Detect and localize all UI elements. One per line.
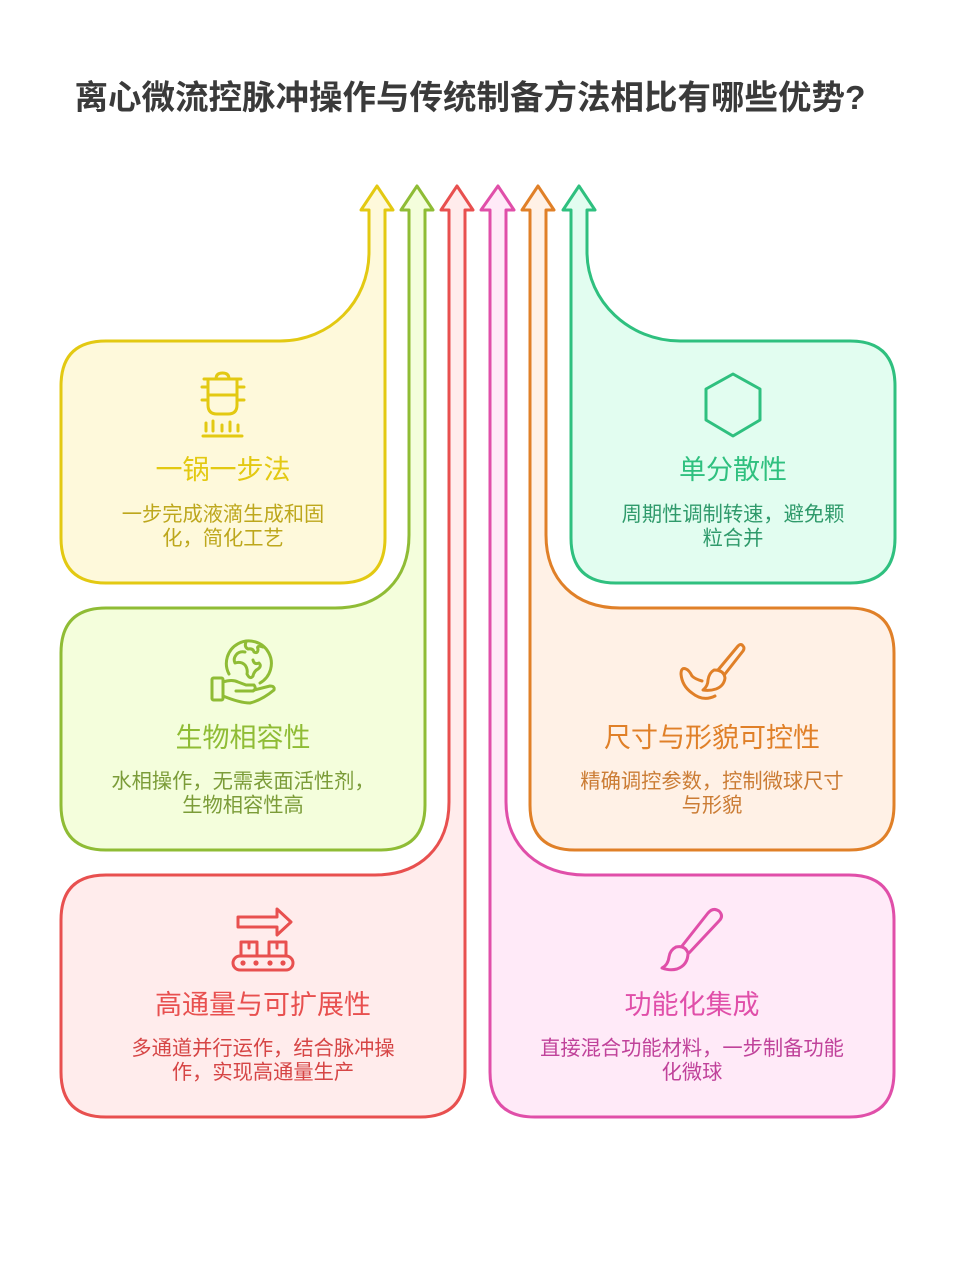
heading: 单分散性 [679, 455, 787, 485]
description: 化微球 [662, 1061, 722, 1084]
description: 作，实现高通量生产 [172, 1061, 354, 1084]
panel: 生物相容性 [61, 186, 433, 850]
title: 离心微流控脉冲操作与传统制备方法相比有哪些优势? [75, 80, 865, 117]
panel: 一锅一步法 [61, 186, 393, 583]
icon: conveyor with arrow [233, 909, 293, 970]
heading: 一锅一步法 [156, 455, 290, 485]
icon: hand holding globe [212, 641, 274, 703]
heading: 高通量与可扩展性 [155, 990, 371, 1020]
description: 直接混合功能材料，一步制备功能 [540, 1037, 844, 1060]
description: 与形貌 [682, 794, 742, 817]
description: 化，简化工艺 [162, 527, 284, 550]
heading: 功能化集成 [624, 990, 760, 1020]
description: 粒合并 [703, 527, 763, 550]
description: 精确调控参数，控制微球尺寸 [580, 770, 844, 793]
icon: brush [662, 909, 722, 970]
panel: 尺寸与形貌可控性 [522, 186, 894, 850]
description: 水相操作，无需表面活性剂， [111, 770, 375, 793]
icon: steaming pot [202, 373, 244, 436]
description: 周期性调制转速，避免颗 [622, 503, 844, 526]
panel: 功能化集成 [481, 186, 894, 1117]
icon: hexagon [706, 374, 760, 436]
heading: 尺寸与形貌可控性 [604, 723, 820, 753]
description: 生物相容性高 [182, 794, 304, 817]
icon: paint brush and palette [681, 644, 744, 698]
description: 多通道并行运作，结合脉冲操 [131, 1037, 395, 1060]
description: 一步完成液滴生成和固 [122, 503, 324, 526]
heading: 生物相容性 [176, 723, 310, 753]
panel: 高通量与可扩展性 [61, 186, 473, 1117]
panel: 单分散性 [563, 186, 895, 583]
